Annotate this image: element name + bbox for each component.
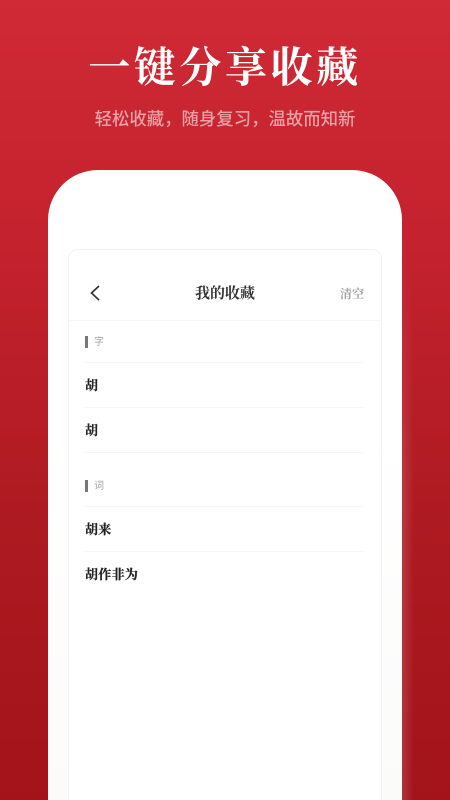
- subtitle: 轻松收藏，随身复习，温故而知新: [95, 109, 355, 129]
- clear button: 清空: [340, 287, 364, 301]
- screen heading: 我的收藏: [195, 286, 255, 302]
- list item: 胡: 胡: [85, 423, 98, 438]
- list item: 胡: 胡: [85, 378, 98, 393]
- header divider: [69, 320, 381, 321]
- panel: favourites screen: [68, 249, 382, 800]
- icon: back arrow: [90, 285, 100, 301]
- title: 一键分享收藏: [88, 46, 362, 92]
- section label: words: 词: [94, 481, 104, 492]
- section marker: characters: [85, 336, 88, 348]
- section label: characters: 字: [94, 337, 104, 348]
- list item: 胡来: 胡来: [85, 522, 112, 537]
- list item: 胡作非为: 胡作非为: [85, 567, 138, 582]
- phone frame shadow: [402, 307, 411, 800]
- section marker: words: [85, 480, 88, 492]
- panel: phone frame: [48, 170, 402, 800]
